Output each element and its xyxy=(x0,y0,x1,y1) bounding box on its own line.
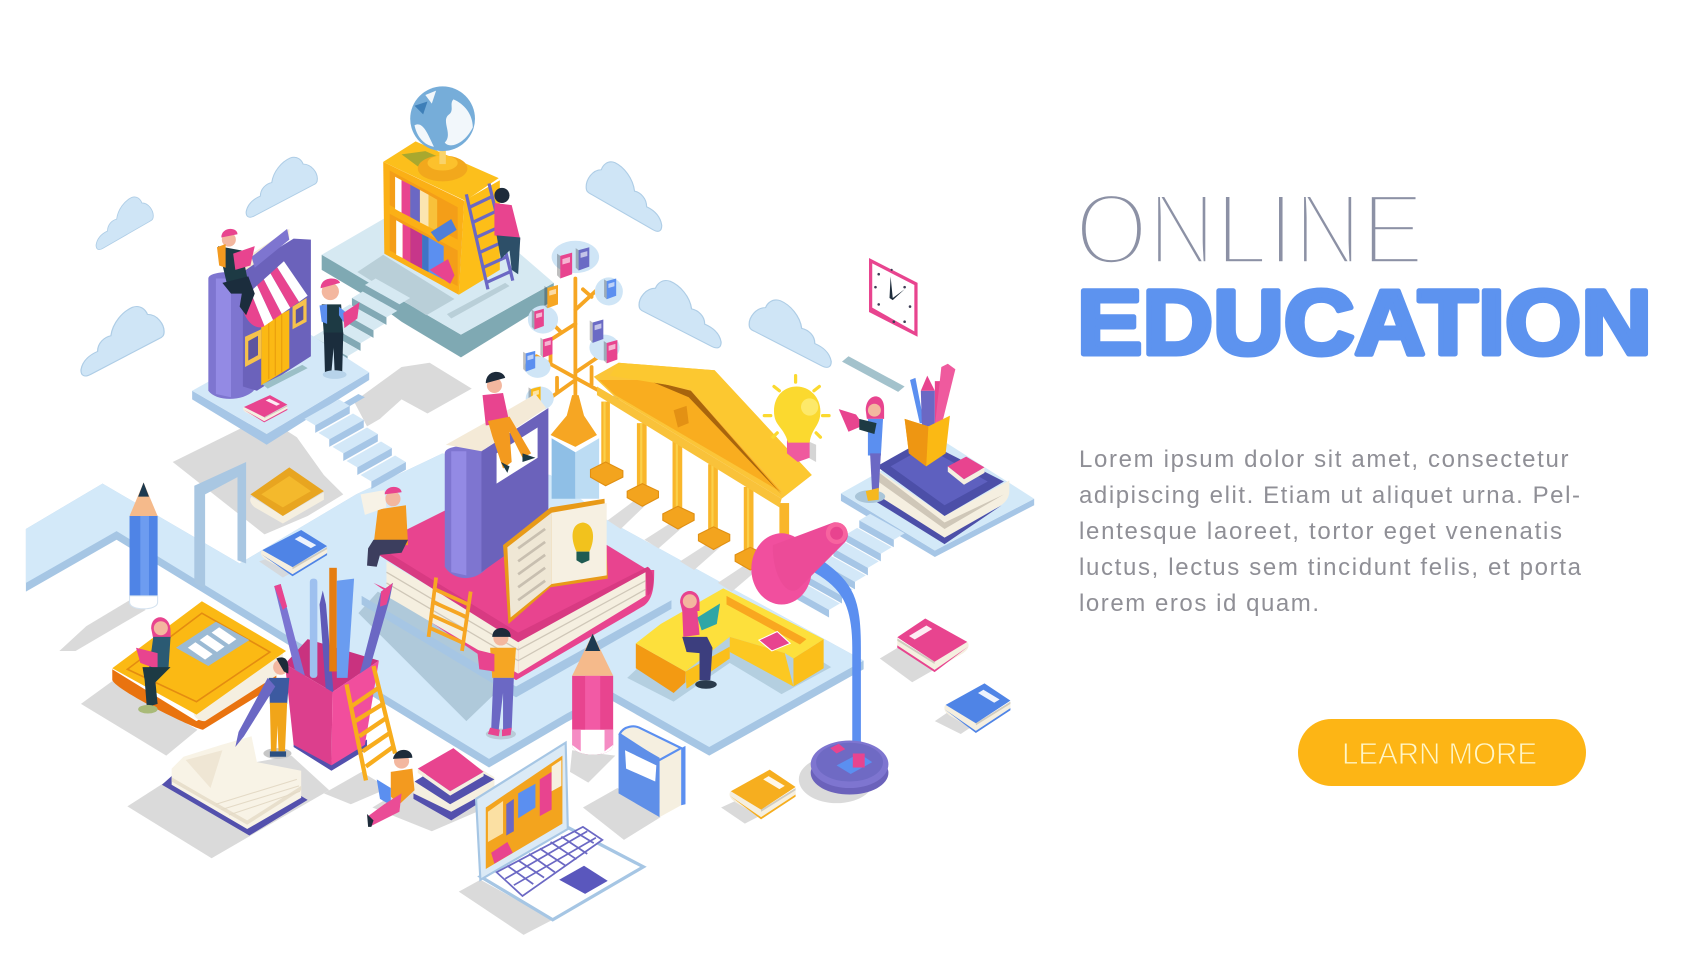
slab below central book xyxy=(362,596,671,697)
small pink book xyxy=(243,395,287,422)
small yellow book xyxy=(730,770,796,819)
store platform with stairs xyxy=(192,329,406,489)
gray temple column shadows xyxy=(608,499,761,592)
body text: adipiscing elit. Etiam ut aliquet urna. Pel- xyxy=(1079,482,1580,509)
ladder and person on bookcase xyxy=(466,184,520,289)
standing blue book xyxy=(619,726,685,817)
title: ONLINE: ONLINE xyxy=(1075,174,1424,286)
blue book xyxy=(259,530,327,578)
title: EDUCATION: EDUCATION xyxy=(1077,272,1652,374)
person seated reading xyxy=(367,750,415,827)
person sitting on purple book xyxy=(483,372,535,473)
body text: luctus, lectus sem tincidunt felis, et porta xyxy=(1079,554,1582,581)
pen cup xyxy=(274,568,393,771)
open white book xyxy=(162,736,308,836)
store book xyxy=(208,229,311,399)
yellow book xyxy=(250,467,324,524)
woman reading xyxy=(839,396,885,503)
small pink book xyxy=(897,619,969,672)
central pink book xyxy=(374,481,654,680)
bookcase xyxy=(383,141,500,295)
knowledge tree xyxy=(523,241,627,447)
temple xyxy=(590,363,812,570)
small blue book xyxy=(944,683,1010,733)
door frame xyxy=(194,462,246,588)
teal stripe xyxy=(842,356,905,392)
body text: lentesque laoreet, tortor eget venenatis xyxy=(1079,518,1562,545)
purple standing book xyxy=(445,394,548,578)
man writing with pencil xyxy=(235,657,291,759)
clouds xyxy=(81,157,831,376)
body text xyxy=(1079,446,1582,617)
right platform with stairs xyxy=(795,438,1034,617)
pedestal xyxy=(552,438,599,499)
button: learn more xyxy=(1298,719,1586,786)
large purple book with pencil cup xyxy=(877,364,1009,544)
top platform with stairs xyxy=(313,216,554,364)
orange ladder xyxy=(429,578,471,651)
sofa xyxy=(627,588,831,702)
main floor xyxy=(26,453,864,759)
button: learn more: LEARN MORE xyxy=(1342,736,1537,771)
globe xyxy=(410,86,475,181)
open book with bulb xyxy=(503,499,608,624)
laptop xyxy=(476,743,643,920)
yellow big book xyxy=(112,601,286,730)
body text: Lorem ipsum dolor sit amet, consectetur xyxy=(1079,446,1568,473)
body text: lorem eros id quam. xyxy=(1079,590,1319,617)
floor shadow below central book xyxy=(358,592,520,721)
clock xyxy=(869,258,918,337)
light bulb xyxy=(764,376,829,462)
gray floor shadows xyxy=(59,363,977,935)
blue pencil xyxy=(130,483,158,609)
lamp xyxy=(751,522,888,795)
small stack of books xyxy=(413,748,494,820)
main floor edge xyxy=(26,453,864,768)
standing man with pink book xyxy=(320,278,359,379)
yellow ladder xyxy=(347,666,395,780)
woman on yellow book xyxy=(136,617,171,714)
standing man with book xyxy=(477,628,516,739)
white area under temple xyxy=(605,475,793,596)
person reading on store book xyxy=(217,229,255,315)
person seated with open book xyxy=(361,487,408,567)
woman on sofa xyxy=(680,591,720,689)
illustration: isometric online education scene xyxy=(26,86,1034,935)
pink pencil xyxy=(572,634,613,755)
